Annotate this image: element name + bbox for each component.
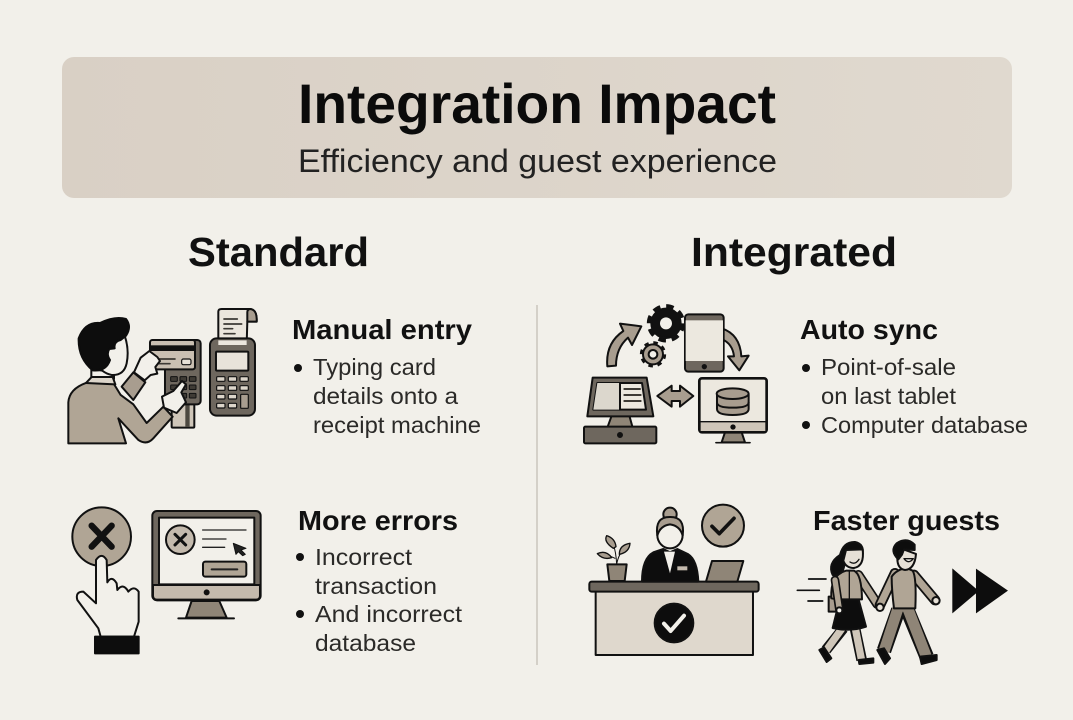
subtitle: Efficiency and guest experience	[298, 143, 777, 179]
icon: tablet	[685, 314, 724, 372]
icon: double arrow	[657, 386, 693, 407]
icon: person	[68, 318, 186, 443]
text: Auto sync: Auto sync	[800, 314, 938, 345]
text: More errors: transaction	[315, 573, 437, 599]
title banner	[62, 57, 1012, 198]
text: Manual entry: receipt machine	[313, 412, 481, 438]
text: More errors: More errors	[298, 505, 458, 536]
icon: monitor with error dialog	[152, 511, 261, 618]
title: Integration Impact	[298, 72, 776, 135]
text: Manual entry: details onto a	[313, 383, 459, 409]
text: Manual entry: Manual entry	[292, 314, 472, 345]
text: Manual entry: Typing card	[313, 354, 436, 380]
text: Auto sync: Computer database	[821, 412, 1028, 438]
icon: receptionist	[642, 508, 698, 582]
text: Manual entry	[292, 314, 481, 438]
icon: large gear	[649, 307, 683, 340]
icon: laptop	[706, 561, 743, 582]
icon: monitor with database	[699, 378, 767, 443]
text: More errors: And incorrect	[315, 601, 462, 627]
icon: guests walking fast	[797, 540, 1008, 664]
icon: motion lines	[797, 579, 826, 601]
icon: desk	[589, 582, 759, 655]
icon: pressing hand	[77, 556, 139, 653]
icon: person typing on card terminal	[68, 309, 257, 443]
icon: small gear	[642, 343, 664, 366]
icon: error button and monitor	[72, 507, 261, 653]
icon: receptionist at desk	[589, 505, 759, 655]
icon: sync between devices	[584, 307, 767, 443]
icon: plant	[597, 536, 630, 581]
text: Auto sync: Point-of-sale	[821, 354, 956, 380]
icon: fast forward arrows	[952, 568, 1008, 613]
icon: curved arrow down	[722, 328, 749, 370]
text: Auto sync: on last tablet	[821, 383, 956, 409]
icon: man	[876, 540, 940, 664]
text: More errors: database	[315, 630, 416, 656]
icon: curved arrow up	[607, 324, 641, 366]
icon: x button	[72, 507, 131, 566]
text: More errors: Incorrect	[315, 544, 412, 570]
icon: second payment terminal with receipt	[210, 309, 257, 416]
column heading: Integrated: Integrated	[691, 229, 897, 275]
text: More errors	[296, 505, 462, 656]
text: Faster guests: Faster guests	[813, 505, 1000, 536]
icon: check badge	[702, 505, 744, 547]
column heading: Standard: Standard	[188, 229, 369, 275]
text: Auto sync	[800, 314, 1028, 438]
icon: first terminal and card	[150, 340, 201, 428]
icon: woman	[819, 542, 877, 664]
icon: point of sale terminal	[584, 378, 656, 443]
